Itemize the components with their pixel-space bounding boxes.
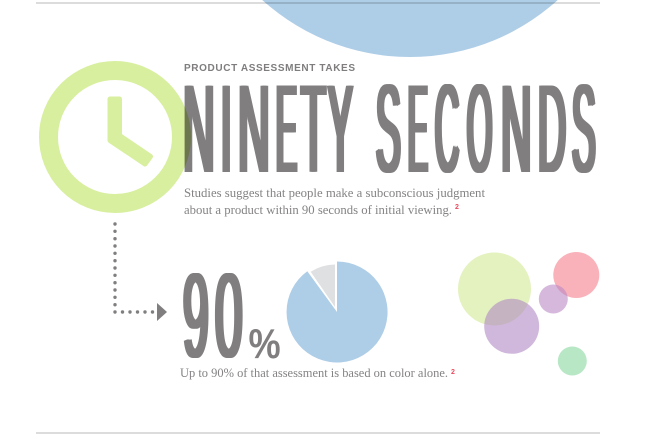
top blue circle <box>190 0 630 57</box>
headline: ninety seconds: E <box>274 60 295 199</box>
headline: ninety seconds: D <box>536 60 564 199</box>
caption: 2 <box>451 369 455 376</box>
stat: 90: 0 <box>213 249 241 383</box>
headline: ninety seconds: T <box>299 60 324 199</box>
description text: Studies suggest that people make a subconscious judgment <box>184 185 485 200</box>
headline: ninety seconds: I <box>219 60 230 199</box>
stat: 90: 9 <box>181 249 207 383</box>
headline: ninety seconds: C <box>433 60 457 199</box>
headline: ninety seconds: N <box>499 60 529 199</box>
headline: ninety seconds: E <box>406 60 425 199</box>
headline: ninety seconds: O <box>465 60 491 199</box>
dotted arrow connector <box>113 222 167 321</box>
subheading: PRODUCT ASSESSMENT TAKES <box>184 63 355 74</box>
headline: ninety seconds: Y <box>326 60 351 199</box>
pie chart: 90 percent <box>287 261 388 362</box>
percent sign: % <box>248 322 281 368</box>
headline: ninety seconds: S <box>374 60 399 199</box>
headline: ninety seconds: S <box>570 60 594 199</box>
caption: Up to 90% of that assessment is based on color alone. <box>180 365 448 380</box>
description text <box>184 185 485 217</box>
description text: 2 <box>455 204 459 211</box>
description text: about a product within 90 seconds of initial viewing. <box>184 202 452 217</box>
colour bubbles <box>458 252 599 376</box>
headline: ninety seconds: N <box>236 60 267 199</box>
headline: ninety seconds: N <box>181 60 212 199</box>
